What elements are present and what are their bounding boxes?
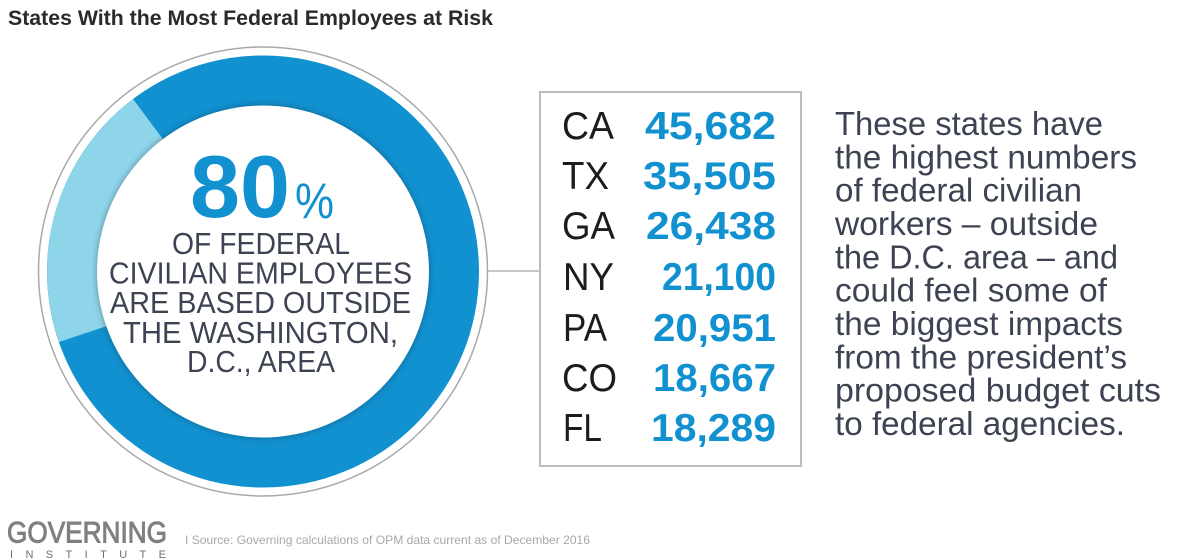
logo: Governing Institute <box>7 516 167 560</box>
donut segment: D.C. area <box>47 99 180 342</box>
explanatory paragraph: These states have <box>835 105 1103 142</box>
donut caption: D.C., AREA <box>187 344 335 379</box>
donut caption: OF FEDERAL <box>172 226 350 261</box>
source note: I Source: Governing calculations of OPM data current as of December 2016 <box>185 533 590 547</box>
state abbreviations: FL <box>563 407 602 450</box>
connector line <box>488 270 540 272</box>
state abbreviations: GA <box>562 205 615 248</box>
employee counts: 20,951 <box>653 307 776 350</box>
explanatory paragraph: to federal agencies. <box>835 405 1125 442</box>
donut caption: ARE BASED OUTSIDE <box>110 285 411 320</box>
logo: Governing Institute: GOVERNING <box>7 516 167 550</box>
state abbreviations <box>562 105 617 450</box>
big number 80%: 80 <box>190 137 290 236</box>
title: States With the Most Federal Employees at Risk <box>8 7 493 30</box>
big number 80%: % <box>295 173 334 229</box>
donut caption <box>109 226 412 379</box>
donut segment: outside D.C. area <box>47 56 479 488</box>
state abbreviations: NY <box>563 256 614 299</box>
donut caption: CIVILIAN EMPLOYEES <box>109 256 412 290</box>
employee counts: 26,438 <box>646 205 776 248</box>
explanatory paragraph: of federal civilian <box>835 172 1082 209</box>
employee counts: 18,289 <box>651 407 776 450</box>
explanatory paragraph: could feel some of <box>835 272 1108 309</box>
explanatory paragraph: the biggest impacts <box>835 305 1123 342</box>
employee counts: 35,505 <box>643 155 776 198</box>
donut caption: THE WASHINGTON, <box>123 315 398 350</box>
employee counts: 18,667 <box>653 357 776 400</box>
table panel: states <box>540 92 801 466</box>
state abbreviations: TX <box>562 155 609 198</box>
employee counts <box>643 105 776 450</box>
donut chart: 80 percent <box>38 47 488 496</box>
explanatory paragraph: the D.C. area – and <box>835 238 1118 275</box>
state abbreviations: CA <box>562 105 614 148</box>
explanatory paragraph: proposed budget cuts <box>835 372 1161 409</box>
explanatory paragraph: workers – outside <box>834 205 1098 242</box>
explanatory paragraph: from the president’s <box>835 338 1127 375</box>
explanatory paragraph <box>834 105 1161 442</box>
explanatory paragraph: the highest numbers <box>835 138 1137 175</box>
big number 80% <box>190 137 334 236</box>
state abbreviations: CO <box>562 357 617 400</box>
employee counts: 21,100 <box>662 256 776 299</box>
employee counts: 45,682 <box>645 105 776 148</box>
state abbreviations: PA <box>563 307 607 350</box>
